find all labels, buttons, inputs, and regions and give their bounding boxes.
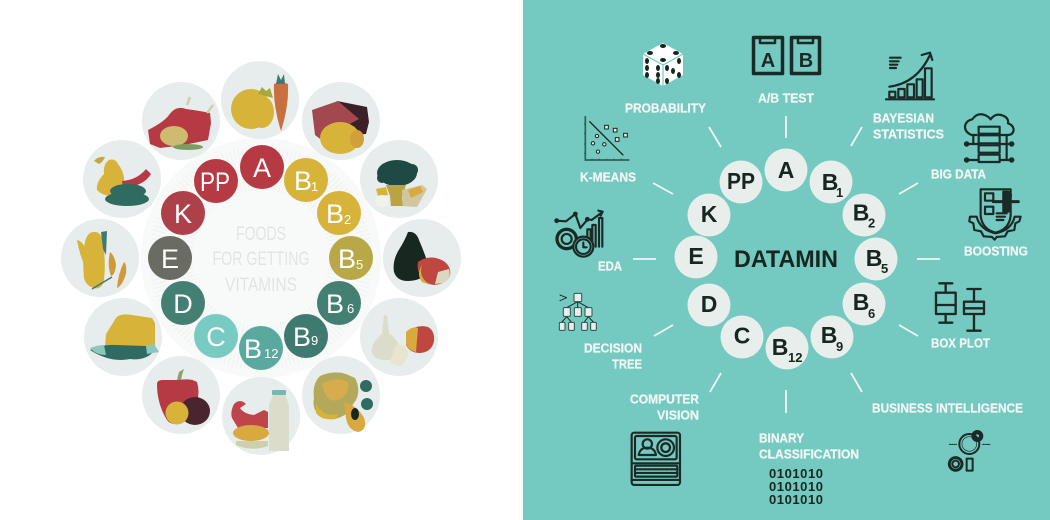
topic circle: A: A — [778, 157, 794, 183]
food circle: pepper and orange — [142, 356, 220, 434]
food circle: crab and milk — [222, 377, 300, 455]
topic circle: B12 — [766, 326, 808, 370]
center heading: foods for getting vitamins: VITAMINS — [225, 275, 297, 296]
food circle: papaya and cauliflower — [302, 356, 380, 434]
label: decision tree: TREE — [612, 358, 642, 372]
label: bayesian statistics: STATISTICS — [873, 128, 944, 142]
icon: big data cloud server — [965, 114, 1014, 162]
vitamin circle: E — [148, 236, 192, 280]
food circle: carrot and pumpkin — [221, 61, 299, 139]
topic circle: B6: B — [853, 289, 869, 315]
topic circle: B12: B — [772, 334, 788, 360]
topic circle: B5 — [854, 238, 898, 280]
topic circle: B2 — [842, 194, 886, 236]
icon: k-means scatter plot — [584, 116, 629, 161]
icon: bayesian growth chart — [886, 53, 934, 99]
vitamin circle: B12 — [239, 326, 283, 370]
vitamin circle: D: D — [173, 289, 193, 319]
vitamin circle: B5: B — [338, 244, 356, 274]
topic circle: B6: 6 — [868, 306, 875, 321]
icon: a/b test boards: B — [799, 50, 813, 72]
label: bayesian statistics — [873, 112, 944, 142]
vitamin circle: B2: 2 — [344, 212, 351, 227]
vitamin circle: B6: 6 — [347, 301, 354, 316]
vitamin circle: B9 — [284, 314, 328, 358]
topic circle: PP: PP — [727, 168, 755, 194]
vitamin circle: A — [240, 145, 284, 189]
vitamin circle: B12: 12 — [264, 346, 278, 361]
icon: boosting shield and gear — [969, 189, 1021, 240]
vitamin circle: D — [161, 281, 205, 325]
topic circle: C: C — [734, 322, 750, 348]
label: boosting: BOOSTING — [964, 244, 1028, 258]
vitamin circle: B6: B — [326, 289, 344, 319]
icon: binary code: 0101010 — [769, 479, 823, 494]
icon: a/b test boards: A — [761, 50, 775, 72]
topic circle: E: E — [688, 243, 704, 269]
vitamin circle: B12: B — [244, 334, 262, 364]
topic circle: B9: 9 — [836, 339, 843, 354]
label: k-means: K-MEANS — [580, 170, 636, 184]
label: computer vision: VISION — [657, 408, 699, 422]
label: binary classification: CLASSIFICATION — [759, 448, 859, 462]
vitamin circle: C: C — [206, 322, 226, 352]
vitamin circle: B1: 1 — [311, 179, 318, 194]
topic circle: C — [720, 316, 764, 358]
label: a/b test: A/B TEST — [758, 92, 814, 106]
label: computer vision — [630, 392, 699, 422]
center heading: foods for getting vitamins — [212, 224, 310, 296]
vitamin circle: B1 — [284, 158, 328, 202]
icon: business intelligence magnifier — [949, 431, 990, 471]
food circle: cheese and fish — [84, 298, 162, 376]
icon: eda gears and chart — [555, 211, 603, 257]
icon: decision tree — [559, 293, 596, 330]
vitamin circle: B1: B — [294, 166, 312, 196]
vitamin circle: C — [194, 314, 238, 358]
label: big data: BIG DATA — [931, 168, 986, 182]
label: decision tree — [584, 342, 642, 372]
label: probability: PROBABILITY — [625, 102, 707, 116]
heading: datamin: DATAMIN — [734, 246, 838, 273]
vitamin circle: B5 — [329, 236, 373, 280]
label: bayesian statistics: BAYESIAN — [873, 112, 934, 126]
icon: binary code — [769, 466, 823, 507]
vitamin circle: PP — [194, 159, 238, 203]
vitamin circle: B9: B — [293, 322, 311, 352]
topic circle: B5: 5 — [881, 261, 888, 276]
label: business intelligence: BUSINESS INTELLIGENCE — [872, 402, 1023, 416]
vitamin circle: K — [161, 191, 205, 235]
topic circle: B9 — [810, 316, 854, 358]
topic circle: PP — [720, 160, 762, 204]
food circle: garlic and onion — [360, 298, 438, 376]
center heading: foods for getting vitamins: FOR GETTING — [212, 249, 310, 270]
vitamin circle: K: K — [174, 199, 192, 229]
topic circle: B2: 2 — [868, 216, 875, 230]
label: binary classification — [759, 432, 859, 462]
topic circle: B1 — [810, 160, 852, 204]
label: decision tree: DECISION — [584, 342, 642, 356]
topic circle: A — [764, 148, 808, 192]
vitamin circle: E: E — [161, 244, 179, 274]
topic circle: E — [674, 236, 718, 278]
connector lines — [633, 116, 940, 413]
vitamin circle: A: A — [253, 153, 271, 183]
vitamin circle: B5: 5 — [356, 257, 363, 272]
icon: box plot — [936, 283, 984, 331]
dotted wheel background — [141, 138, 381, 378]
food circle: broccoli — [360, 140, 438, 218]
topic circle: B6 — [842, 282, 886, 326]
icon: binary code: 0101010 — [769, 466, 823, 481]
icon: dice — [643, 43, 683, 86]
food circle: avocado and meat — [383, 219, 461, 297]
icon: computer vision terminal — [632, 433, 680, 485]
vitamin circle: B6 — [317, 281, 361, 325]
topic circle: B5: B — [866, 245, 882, 271]
vitamin circle: B2: B — [326, 199, 344, 229]
food circle: corn — [61, 219, 139, 297]
topic circle: K — [688, 194, 730, 236]
vitamin circle: B9: 9 — [311, 333, 318, 348]
food circle: pear, chili and cucumbers — [83, 140, 161, 218]
food circle: turkey — [142, 82, 220, 160]
icon: binary code: 0101010 — [769, 492, 823, 507]
topic circle: B2: B — [853, 200, 869, 226]
panel: datamin — [523, 0, 1050, 520]
topic circle: D: D — [701, 291, 717, 317]
label: binary classification: BINARY — [759, 432, 805, 446]
topic circle: B1: B — [822, 169, 838, 195]
panel: foods for vitamins — [0, 0, 523, 520]
topic circle: B9: B — [821, 322, 837, 348]
label: computer vision: COMPUTER — [630, 392, 699, 406]
topic circle: B1: 1 — [836, 185, 843, 200]
topic circle: D — [688, 284, 730, 326]
center heading: foods for getting vitamins: FOODS — [236, 224, 286, 245]
label: box plot: BOX PLOT — [931, 336, 990, 350]
topic circle: B12: 12 — [788, 350, 802, 365]
label: eda: EDA — [598, 260, 622, 274]
topic circle: K: K — [701, 201, 718, 227]
vitamin circle: B2 — [317, 191, 361, 235]
icon: a/b test boards — [754, 37, 820, 74]
food circle: bread and potato — [302, 82, 380, 160]
vitamin circle: PP: PP — [200, 167, 230, 197]
